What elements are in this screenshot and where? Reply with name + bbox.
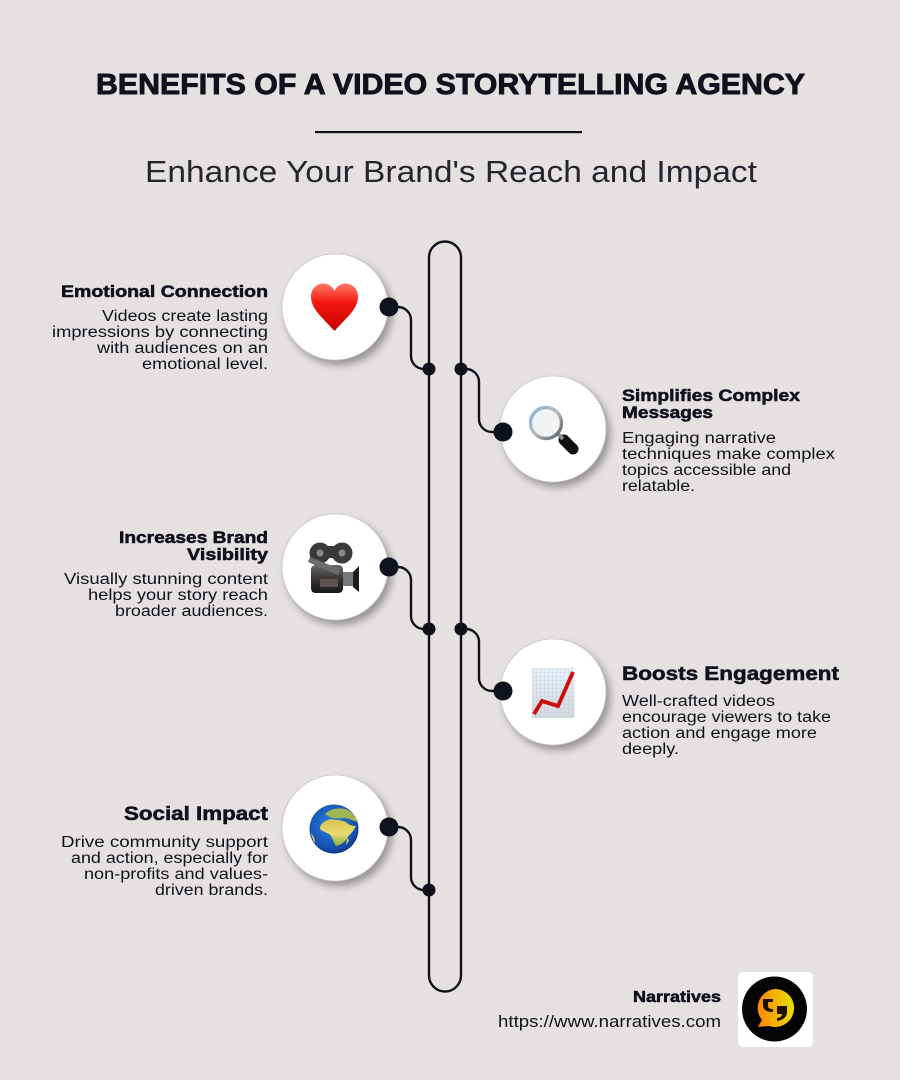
panel: emotional connection xyxy=(52,254,398,373)
icon disc: magnifier xyxy=(500,376,606,482)
body text xyxy=(64,571,269,620)
subtitle: Enhance Your Brand's Reach and Impact xyxy=(145,154,757,189)
icon: globe xyxy=(310,804,358,854)
panel: simplifies complex messages xyxy=(494,376,835,495)
body text: encourage viewers to take xyxy=(622,709,831,726)
heading: Increases Brand xyxy=(119,528,268,547)
connector: social impact xyxy=(389,827,429,890)
connector: emotional connection xyxy=(389,307,429,369)
heading xyxy=(119,528,269,564)
heading: Emotional Connection xyxy=(61,282,268,301)
icon disc: chart xyxy=(500,639,606,745)
body text: Visually stunning content xyxy=(64,571,269,588)
icon disc: globe xyxy=(282,775,388,881)
body text: Engaging narrative xyxy=(622,430,776,447)
connector dot xyxy=(380,558,398,576)
track nodes xyxy=(422,362,468,896)
body text: with audiences on an xyxy=(96,340,268,357)
title rule xyxy=(315,131,582,133)
body text xyxy=(52,308,268,373)
connector dot xyxy=(380,298,398,316)
icon: heart xyxy=(311,284,358,331)
body text xyxy=(61,834,269,899)
logo xyxy=(738,972,813,1047)
panel: boosts engagement xyxy=(494,639,840,758)
body text: driven brands. xyxy=(155,882,268,899)
body text: emotional level. xyxy=(142,356,268,373)
icon: magnifying glass xyxy=(530,408,573,449)
body text: topics accessible and xyxy=(622,462,791,479)
body text: and action, especially for xyxy=(71,850,268,867)
heading: Simplifies Complex xyxy=(622,386,801,405)
icon disc: heart xyxy=(282,254,388,360)
body text: Videos create lasting xyxy=(102,308,268,325)
panel: increases brand visibility xyxy=(64,514,398,620)
body text: broader audiences. xyxy=(115,603,268,620)
heading xyxy=(622,386,801,422)
body text: deeply. xyxy=(622,741,679,758)
panel: social impact xyxy=(61,775,398,899)
connector: increases brand visibility xyxy=(389,567,429,629)
connector dot xyxy=(494,422,512,442)
footer brand name: Narratives xyxy=(633,989,721,1006)
heading: Messages xyxy=(622,403,713,422)
icon disc: camera xyxy=(282,514,388,620)
body text: techniques make complex xyxy=(622,446,835,463)
timeline track xyxy=(429,242,461,992)
body text: Drive community support xyxy=(61,834,269,851)
icon: movie camera xyxy=(308,542,359,593)
heading: Boosts Engagement xyxy=(622,663,840,685)
footer url: https://www.narratives.com xyxy=(498,1013,721,1031)
icon: rising chart xyxy=(532,668,574,718)
body text: relatable. xyxy=(622,478,695,495)
body text: non-profits and values- xyxy=(84,866,268,883)
body text xyxy=(622,430,835,495)
title: BENEFITS OF A VIDEO STORYTELLING AGENCY xyxy=(96,69,805,101)
body text: Well-crafted videos xyxy=(622,693,775,710)
body text: helps your story reach xyxy=(88,587,268,604)
connector dot xyxy=(494,682,512,700)
connector dot xyxy=(380,818,398,836)
body text: impressions by connecting xyxy=(52,324,268,341)
connector: boosts engagement xyxy=(461,629,503,691)
connector: simplifies complex messages xyxy=(461,369,503,432)
body text xyxy=(622,693,831,758)
body text: action and engage more xyxy=(622,725,817,742)
heading: Visibility xyxy=(187,545,269,564)
heading: Social Impact xyxy=(124,803,269,825)
